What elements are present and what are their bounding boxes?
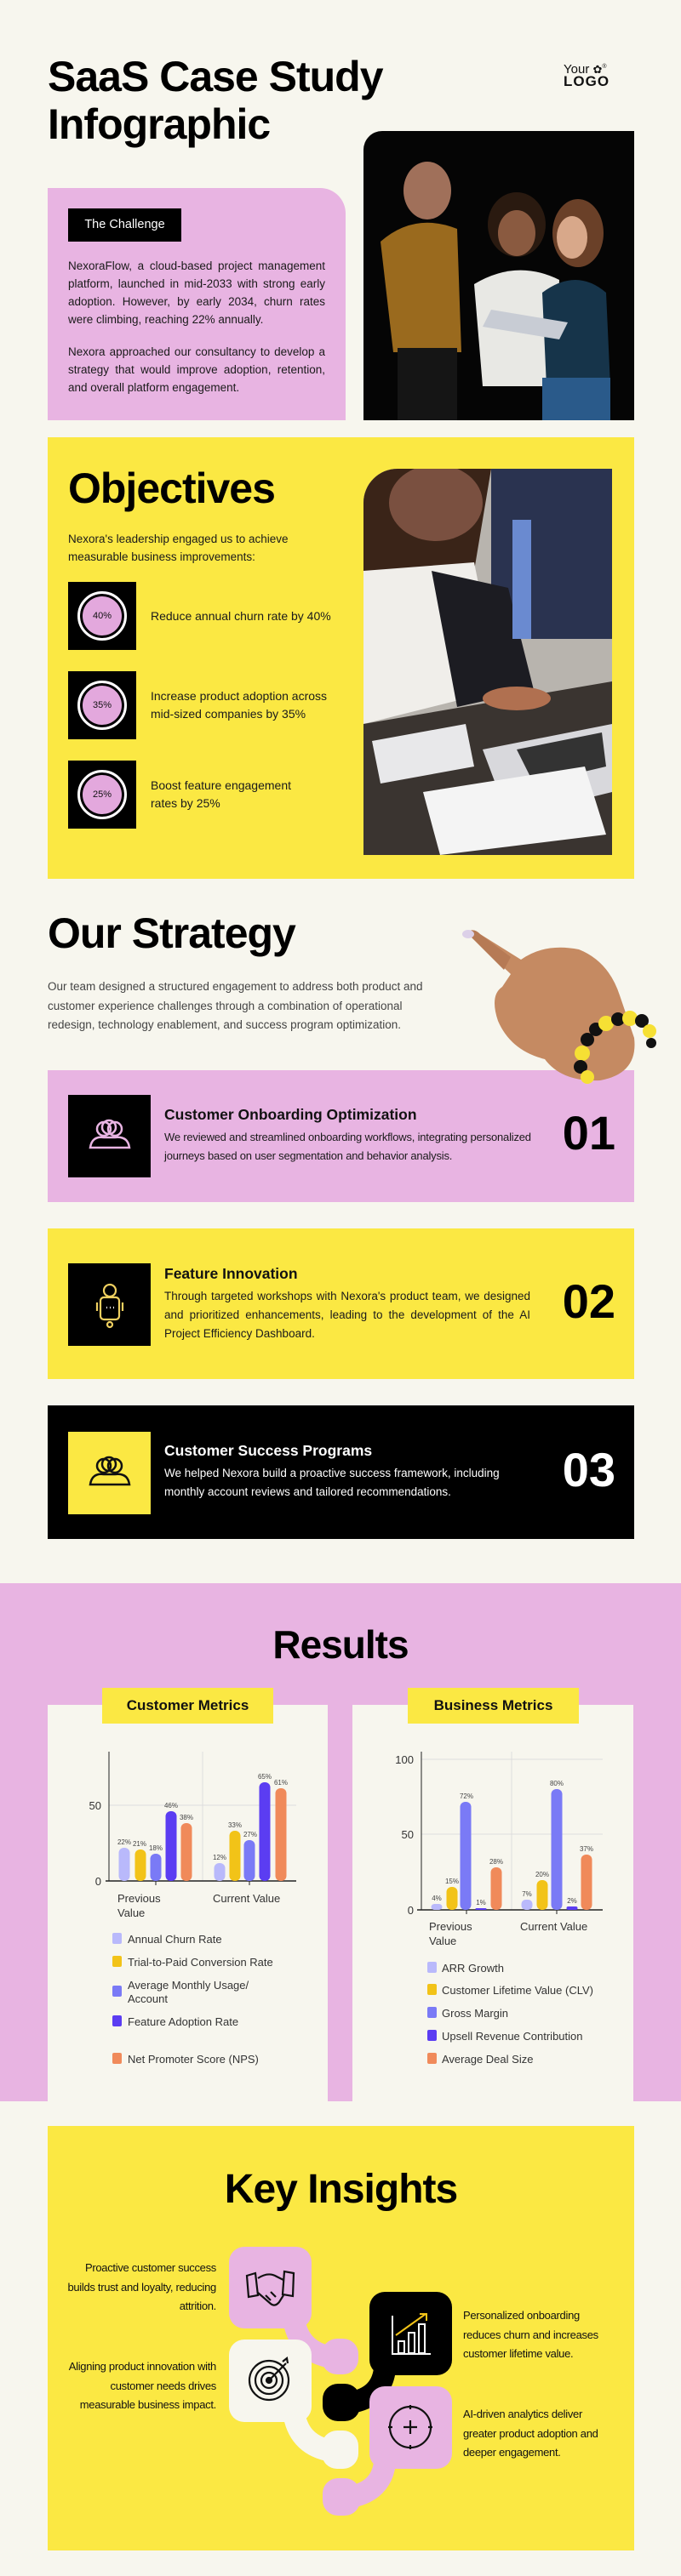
text: card 1	[163, 1106, 531, 1162]
chart: business metrics: Customer Lifetime Value (CLV)	[442, 1984, 593, 1997]
text: card 1: We reviewed and streamlined onboarding workflows, integrating personalized journeys based on user segmentation and behavior analysis.	[164, 1131, 531, 1162]
chart: customer metrics: Value	[117, 1906, 145, 1919]
chart: business metrics: 28%	[489, 1858, 503, 1866]
chart: business metrics: 72%	[460, 1792, 473, 1800]
chart: business metrics: 37%	[580, 1845, 593, 1853]
title: SaaS Case Study Infographic	[48, 53, 383, 148]
objective 3: 25%	[93, 789, 112, 800]
objective 3: Boost feature engagement rates by 25%	[151, 778, 291, 810]
chart: business metrics: Previous	[429, 1920, 472, 1933]
chart: business metrics: 4%	[432, 1895, 442, 1902]
objective 2: Increase product adoption across mid-sized companies by 35%	[151, 689, 327, 721]
objective 2	[68, 671, 327, 739]
diagram: insight shapes	[229, 2247, 452, 2516]
heading: key insights: Key Insights	[225, 2167, 457, 2212]
label: customer metrics: Customer Metrics	[127, 1697, 249, 1713]
number 02: 02	[563, 1274, 615, 1328]
objective 3	[68, 761, 291, 829]
text: insight 4: AI-driven analytics deliver greater product adoption and deeper engagement.	[463, 2408, 598, 2459]
chart: customer metrics: 33%	[228, 1821, 242, 1829]
chart: business metrics: Average Deal Size	[442, 2053, 533, 2066]
chart: business metrics: 80%	[550, 1780, 564, 1787]
chart: customer metrics: Feature Adoption Rate	[128, 2015, 238, 2028]
illustration: pointing hand	[462, 930, 656, 1084]
chart: business metrics: 2%	[567, 1897, 577, 1905]
number 01: 01	[563, 1106, 615, 1160]
chart: customer metrics: 61%	[274, 1779, 288, 1787]
label: the challenge	[68, 208, 181, 242]
icon: robot	[68, 1263, 151, 1346]
chart: business metrics: Value	[429, 1935, 456, 1947]
panel: key insights	[48, 2126, 634, 2550]
chart: customer metrics: Previous	[117, 1892, 161, 1905]
icon: users	[68, 1095, 151, 1177]
chart: customer metrics: 65%	[258, 1773, 272, 1781]
text: card 2: Feature Innovation	[164, 1265, 298, 1282]
text: challenge description: NexoraFlow, a cloud-based project management platform, launched in mid-2033 with strong early adoption. However, by early 2034, churn rates were climbing, reaching 22% annually.	[68, 259, 325, 326]
card: feature innovation	[48, 1228, 634, 1379]
objective 1: Reduce annual churn rate by 40%	[151, 609, 331, 623]
chart: customer metrics: Account	[128, 1992, 168, 2005]
chart: customer metrics: Trial-to-Paid Conversion Rate	[128, 1956, 273, 1969]
chart: customer metrics: 21%	[133, 1840, 146, 1848]
panel: the challenge	[48, 188, 346, 420]
label: the challenge: The Challenge	[84, 218, 165, 231]
chart: customer metrics: 50	[89, 1799, 101, 1812]
heading: results: Results	[272, 1622, 409, 1667]
number 03: 03	[563, 1443, 615, 1496]
chart: business metrics: Gross Margin	[442, 2007, 508, 2020]
objective 1: 40%	[93, 611, 112, 621]
section: results	[0, 1583, 681, 2101]
chart: customer metrics: Net Promoter Score (NPS)	[128, 2053, 259, 2066]
text: card 3: Customer Success Programs	[164, 1442, 372, 1459]
objective 2: 35%	[93, 700, 112, 710]
chart: customer metrics: 18%	[149, 1844, 163, 1852]
chart: customer metrics: 46%	[164, 1802, 178, 1809]
chart: business metrics	[395, 1752, 603, 2066]
chart: business metrics: 7%	[522, 1890, 532, 1898]
chart: customer metrics: Annual Churn Rate	[128, 1933, 222, 1946]
icon: crosshair	[388, 2405, 432, 2449]
text: card 1: Customer Onboarding Optimization	[164, 1106, 417, 1123]
text: card 2	[164, 1265, 530, 1340]
heading: objectives: Objectives	[68, 464, 275, 512]
label: business metrics: Business Metrics	[434, 1697, 552, 1713]
label: business metrics	[408, 1688, 579, 1724]
icon: users group	[68, 1432, 151, 1514]
text: strategy intro: Our team designed a structured engagement to address both product and customer experience challenges through a combination of operational redesign, technology enablement, and success program optimization.	[48, 980, 423, 1031]
icon: handshake	[247, 2271, 294, 2305]
chart: customer metrics: 12%	[213, 1854, 226, 1861]
chart: business metrics: 0	[408, 1904, 414, 1917]
heading: our strategy: Our Strategy	[48, 909, 295, 957]
panel: customer metrics	[48, 1705, 328, 2101]
chart: business metrics: 20%	[535, 1871, 549, 1878]
text: card 3	[164, 1442, 500, 1498]
text: insight 2: Aligning product innovation with customer needs drives measurable business impact.	[69, 2360, 216, 2411]
chart: customer metrics: 0	[95, 1875, 101, 1888]
chart: customer metrics: 22%	[117, 1838, 131, 1846]
panel: objectives	[48, 437, 634, 879]
text: challenge description: Nexora approached our consultancy to develop a strategy that would improve adoption, retention, and overall platform engagement.	[68, 345, 325, 394]
chart: business metrics: 1%	[476, 1899, 486, 1906]
chart: customer metrics: Current Value	[213, 1892, 280, 1905]
chart: business metrics: 15%	[445, 1878, 459, 1885]
text: insight 3: Personalized onboarding reduces churn and increases customer lifetime value.	[463, 2309, 598, 2360]
chart: customer metrics: 38%	[180, 1814, 193, 1821]
photo: team discussion	[363, 131, 634, 420]
chart: business metrics: Current Value	[520, 1920, 587, 1933]
chart: customer metrics: Average Monthly Usage/	[128, 1979, 249, 1992]
chart: business metrics: Upsell Revenue Contribution	[442, 2030, 582, 2043]
text: challenge description	[68, 259, 325, 394]
card: customer onboarding optimization	[48, 1070, 634, 1202]
chart: customer metrics: 27%	[243, 1831, 257, 1838]
chart: customer metrics	[89, 1752, 296, 2066]
logo	[564, 62, 609, 89]
logo: LOGO	[564, 73, 609, 89]
icon: growth chart	[392, 2314, 431, 2354]
objective 1	[68, 582, 331, 650]
photo: meeting with laptop	[363, 469, 612, 855]
text: insight 1: Proactive customer success builds trust and loyalty, reducing attrition.	[67, 2261, 216, 2312]
logo: Your ✿®	[564, 62, 607, 77]
chart: business metrics: ARR Growth	[442, 1962, 504, 1975]
panel: business metrics	[352, 1705, 633, 2101]
text: card 2: Through targeted workshops with Nexora's product team, we designed and prioritized enhancements, leading to the development of the AI Project Efficiency Dashboard.	[164, 1290, 530, 1340]
chart: business metrics: 100	[395, 1753, 414, 1766]
text: objectives intro: Nexora's leadership engaged us to achieve measurable business improvements:	[68, 533, 288, 563]
label: customer metrics	[102, 1688, 273, 1724]
icon: target	[249, 2358, 289, 2400]
chart: business metrics: 50	[402, 1828, 414, 1841]
text: card 3: We helped Nexora build a proactive success framework, including monthly account reviews and tailored recommendations.	[164, 1467, 500, 1498]
card: customer success programs	[48, 1405, 634, 1539]
